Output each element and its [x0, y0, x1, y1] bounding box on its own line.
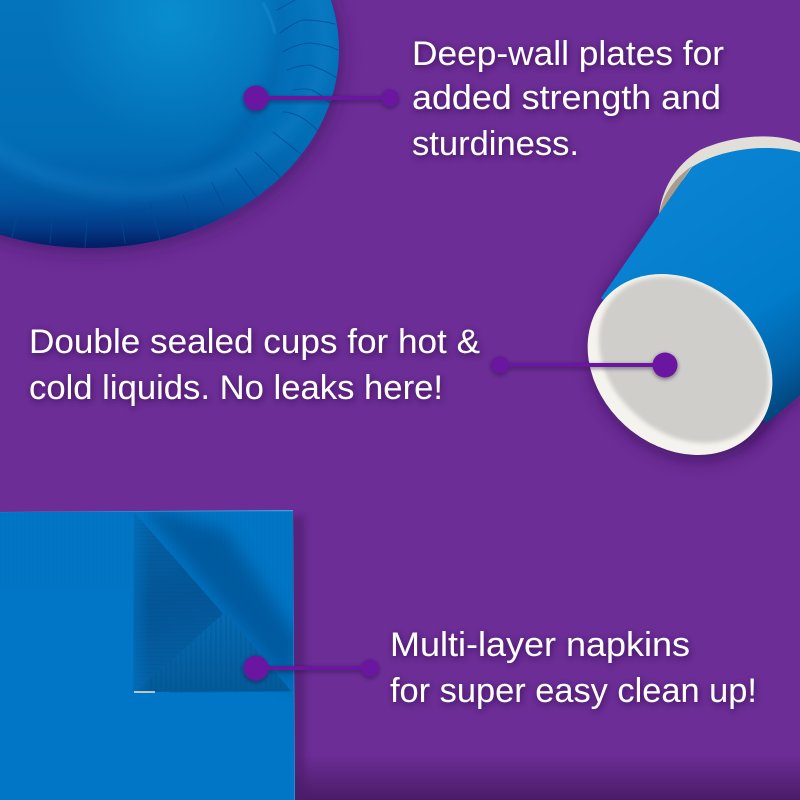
callout: cup connector [492, 352, 678, 378]
cup rim [659, 136, 800, 214]
text: cup feature [29, 323, 480, 407]
text: cup feature: cold liquids. No leaks here! [29, 369, 443, 407]
cup [583, 136, 800, 467]
napkin fold shadow [145, 512, 294, 689]
text: cup feature: Double sealed cups for hot & [29, 323, 480, 361]
text: plate feature: sturdiness. [412, 125, 579, 163]
text: napkin feature: for super easy clean up! [390, 672, 757, 710]
cup body [601, 148, 800, 423]
text: napkin feature [390, 626, 757, 710]
napkin fold [132, 512, 291, 692]
text: napkin feature: Multi-layer napkins [390, 626, 690, 664]
napkin [0, 505, 305, 800]
text: plate feature [412, 35, 724, 163]
cup base [588, 274, 772, 455]
callout: napkin connector [244, 656, 378, 680]
plate [0, 0, 344, 254]
callout: plate connector [244, 86, 398, 110]
text: plate feature: Deep-wall plates for [412, 35, 724, 73]
text: plate feature: added strength and [412, 79, 721, 117]
